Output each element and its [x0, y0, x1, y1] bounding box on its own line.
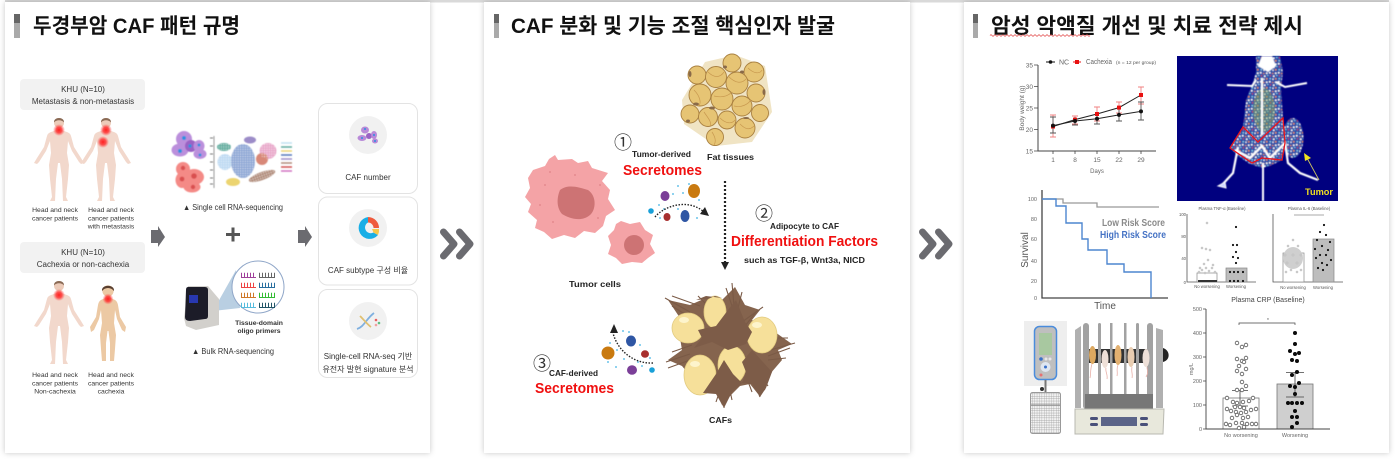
chart: body weight line chart: 15 [1093, 157, 1101, 164]
chart: plasma CRP: * [1267, 318, 1270, 324]
chart: plasma CRP: 400 [1193, 331, 1202, 337]
step 2 label: Differentiation Factors [731, 233, 878, 250]
chart: plasma IL-6 [1273, 206, 1343, 290]
patient label 2: Head and neck [88, 207, 134, 214]
chart: survival curve: 60 [1031, 237, 1037, 243]
arrow: sequencing to analysis [298, 226, 312, 247]
step 1 label: Tumor-derived [632, 149, 691, 159]
step 3 label: CAF-derived [549, 368, 598, 378]
card: CAF subtype: CAF subtype 구성 비율 [328, 266, 408, 275]
icon: patient without metastasis [34, 118, 84, 201]
chart: survival curve: 40 [1031, 259, 1037, 265]
card: gene signature analysis: 유전자 발현 signature 분석 [322, 364, 414, 374]
cohort box: cachexia: KHU (N=10) [61, 248, 105, 257]
icon: non-cachexia patient [34, 281, 84, 364]
title marker [14, 14, 20, 38]
label: fat tissues: Fat tissues [707, 152, 754, 162]
chart: body weight line chart: 30 [1026, 84, 1033, 91]
chart: plasma IL-6: Plasma IL-6 (Baseline) [1288, 206, 1331, 211]
panel: head and neck cancer CAF patterns [5, 2, 430, 453]
icon: red cells [176, 162, 204, 192]
chart: body weight line chart: 25 [1026, 106, 1033, 112]
icon: cachexia patient [90, 285, 126, 361]
patient label 1: cancer patients [32, 215, 79, 222]
chart: survival curve: 100 [1028, 197, 1037, 203]
title marker [494, 14, 499, 38]
heading: 두경부암 CAF 패턴 규명 [33, 15, 240, 38]
step 3 label [533, 354, 614, 397]
chart: plasma CRP: mg/L [1189, 363, 1195, 375]
chart: plasma CRP: 200 [1193, 379, 1202, 385]
chart: body weight line chart [1019, 59, 1157, 175]
chart: plasma TNF-alpha: 80 [1181, 234, 1187, 239]
title marker [973, 14, 978, 38]
arrow: adipocyte to CAF [721, 181, 729, 270]
patient label 1: Head and neck [32, 207, 78, 214]
chart: survival curve: High Risk Score [1100, 230, 1166, 241]
chart: survival curve [1020, 190, 1168, 312]
chart: plasma CRP: No worsening [1224, 433, 1258, 439]
cohort box: metastasis: KHU (N=10) [61, 85, 105, 94]
icon: purple cells [172, 131, 206, 159]
chart: body weight line chart: 15 [1026, 148, 1033, 156]
chart: survival curve: Low Risk Score [1102, 218, 1165, 229]
plus sign [226, 228, 240, 242]
cohort box: cachexia: Cachexia or non-cachexia [37, 260, 130, 269]
chart: plasma IL-6: No worsening [1280, 285, 1306, 290]
step 2 label [731, 204, 878, 265]
chart: body weight line chart: 8 [1073, 157, 1077, 164]
image: mouse scan with tumor [1177, 56, 1338, 201]
patient label 2: cancer patients [88, 215, 135, 222]
heading: CAF 분화 및 기능 조절 핵심인자 발굴 [511, 15, 835, 38]
arrow: cohorts to sequencing [151, 226, 165, 247]
chart: plasma TNF-alpha: 100 [1179, 212, 1187, 217]
patient label 3: Head and neck [32, 372, 78, 379]
heading: 암성 악액질 개선 및 치료 전략 제시 [991, 15, 1303, 38]
chart: plasma TNF-alpha: Worsening [1226, 284, 1247, 289]
chart: body weight line chart: (n = 12 per group) [1116, 60, 1157, 65]
chart: body weight line chart: 1 [1051, 157, 1055, 164]
icon: grip strength meter [1024, 321, 1067, 434]
step 1 label: Secretomes [623, 162, 702, 179]
step 2 label: such as TGF-β, Wnt3a, NICD [744, 255, 865, 265]
chart: plasma TNF-alpha: Plasma TNF-α (Baseline) [1198, 206, 1246, 211]
panel: CAF differentiation factors [484, 2, 910, 453]
step 3 label: ③ [533, 354, 551, 374]
chart: plasma IL-6: Worsening [1313, 285, 1334, 290]
step 3 label: Secretomes [535, 380, 614, 397]
label: CAFs: CAFs [709, 415, 732, 425]
spell-check underline [990, 35, 1090, 36]
step 1 label: ① [614, 133, 632, 153]
card: gene signature analysis [318, 290, 418, 378]
card: CAF number: CAF number [345, 173, 391, 182]
chart: plasma TNF-alpha: No worsening [1194, 284, 1220, 289]
patient label 4: cachexia [98, 389, 125, 396]
step 1 label [614, 133, 702, 179]
chart: plasma CRP [1189, 297, 1330, 439]
icon: CAFs cluster [665, 283, 795, 408]
chart: body weight line chart: NC [1059, 60, 1069, 66]
chart: plasma TNF-alpha [1179, 206, 1256, 289]
chart: body weight line chart: 29 [1137, 157, 1145, 164]
step 2 label: ② [755, 204, 773, 224]
chart: plasma TNF-alpha: 40 [1181, 256, 1187, 261]
chart: single cell tSNE clusters [210, 136, 292, 188]
icon: fat tissue [681, 54, 772, 146]
chart: body weight line chart: 20 [1026, 127, 1033, 134]
patient label 4: cancer patients [88, 380, 135, 387]
chart: body weight line chart: 22 [1115, 157, 1123, 164]
panel: cancer cachexia treatment strategy [964, 2, 1389, 453]
card: CAF subtype [318, 197, 418, 285]
icon: tumor-derived secretomes [648, 183, 709, 222]
chart: survival curve: 20 [1031, 279, 1037, 285]
chart: body weight line chart: Body weight (g) [1019, 85, 1026, 131]
icon: rotarod apparatus [1075, 323, 1169, 434]
chart: body weight line chart: Days [1090, 169, 1104, 175]
cohort box: metastasis [20, 79, 145, 110]
icon: CAF-derived secretomes [602, 324, 655, 375]
card: gene signature analysis: Single-cell RNA-seq 기반 [324, 352, 413, 361]
icon: large tumor cell [525, 155, 615, 239]
caption: bulk sequencing: ▲ Bulk RNA-sequencing [192, 347, 274, 356]
icon: small tumor cell [608, 221, 655, 264]
chart: plasma TNF-alpha: 0 [1184, 280, 1187, 285]
chart: plasma CRP: Plasma CRP (Baseline) [1231, 297, 1305, 304]
chart: body weight line chart: Cachexia [1086, 59, 1112, 66]
patient label 3: Non-cachexia [34, 389, 76, 396]
patient label 4: Head and neck [88, 372, 134, 379]
label: tumor cells: Tumor cells [569, 279, 621, 289]
chart: plasma CRP: 100 [1193, 403, 1202, 409]
chart: survival curve: 80 [1031, 217, 1037, 223]
chart: survival curve: Survival [1020, 232, 1031, 268]
icon: patient with metastasis [81, 118, 131, 201]
patient label 3: cancer patients [32, 380, 79, 387]
chart: survival curve: Time [1094, 301, 1116, 312]
chart: plasma CRP: 500 [1193, 307, 1202, 313]
chart: body weight line chart: 35 [1026, 62, 1033, 70]
caption: oligo primers: oligo primers [237, 328, 281, 335]
chart: plasma CRP: 300 [1193, 355, 1202, 361]
arrow: panel 1 to panel 2 [444, 232, 470, 256]
step 2 label: Adipocyte to CAF [770, 221, 839, 231]
image: mouse scan with tumor: Tumor [1305, 187, 1333, 197]
caption: oligo primers: Tissue-domain [235, 320, 283, 327]
caption: single cell sequencing: ▲ Single cell RNA-sequencing [183, 203, 283, 212]
arrow: panel 2 to panel 3 [922, 232, 949, 256]
chart: plasma CRP: Worsening [1282, 433, 1308, 439]
icon: sequencer with primers [184, 261, 284, 330]
chart: survival curve: 0 [1034, 296, 1037, 302]
cohort box: metastasis: Metastasis & non-metastasis [32, 97, 134, 106]
card: CAF number [318, 104, 418, 194]
cohort box: cachexia [20, 242, 145, 273]
patient label 2: with metastasis [87, 224, 135, 231]
chart: plasma CRP: 0 [1199, 427, 1202, 433]
